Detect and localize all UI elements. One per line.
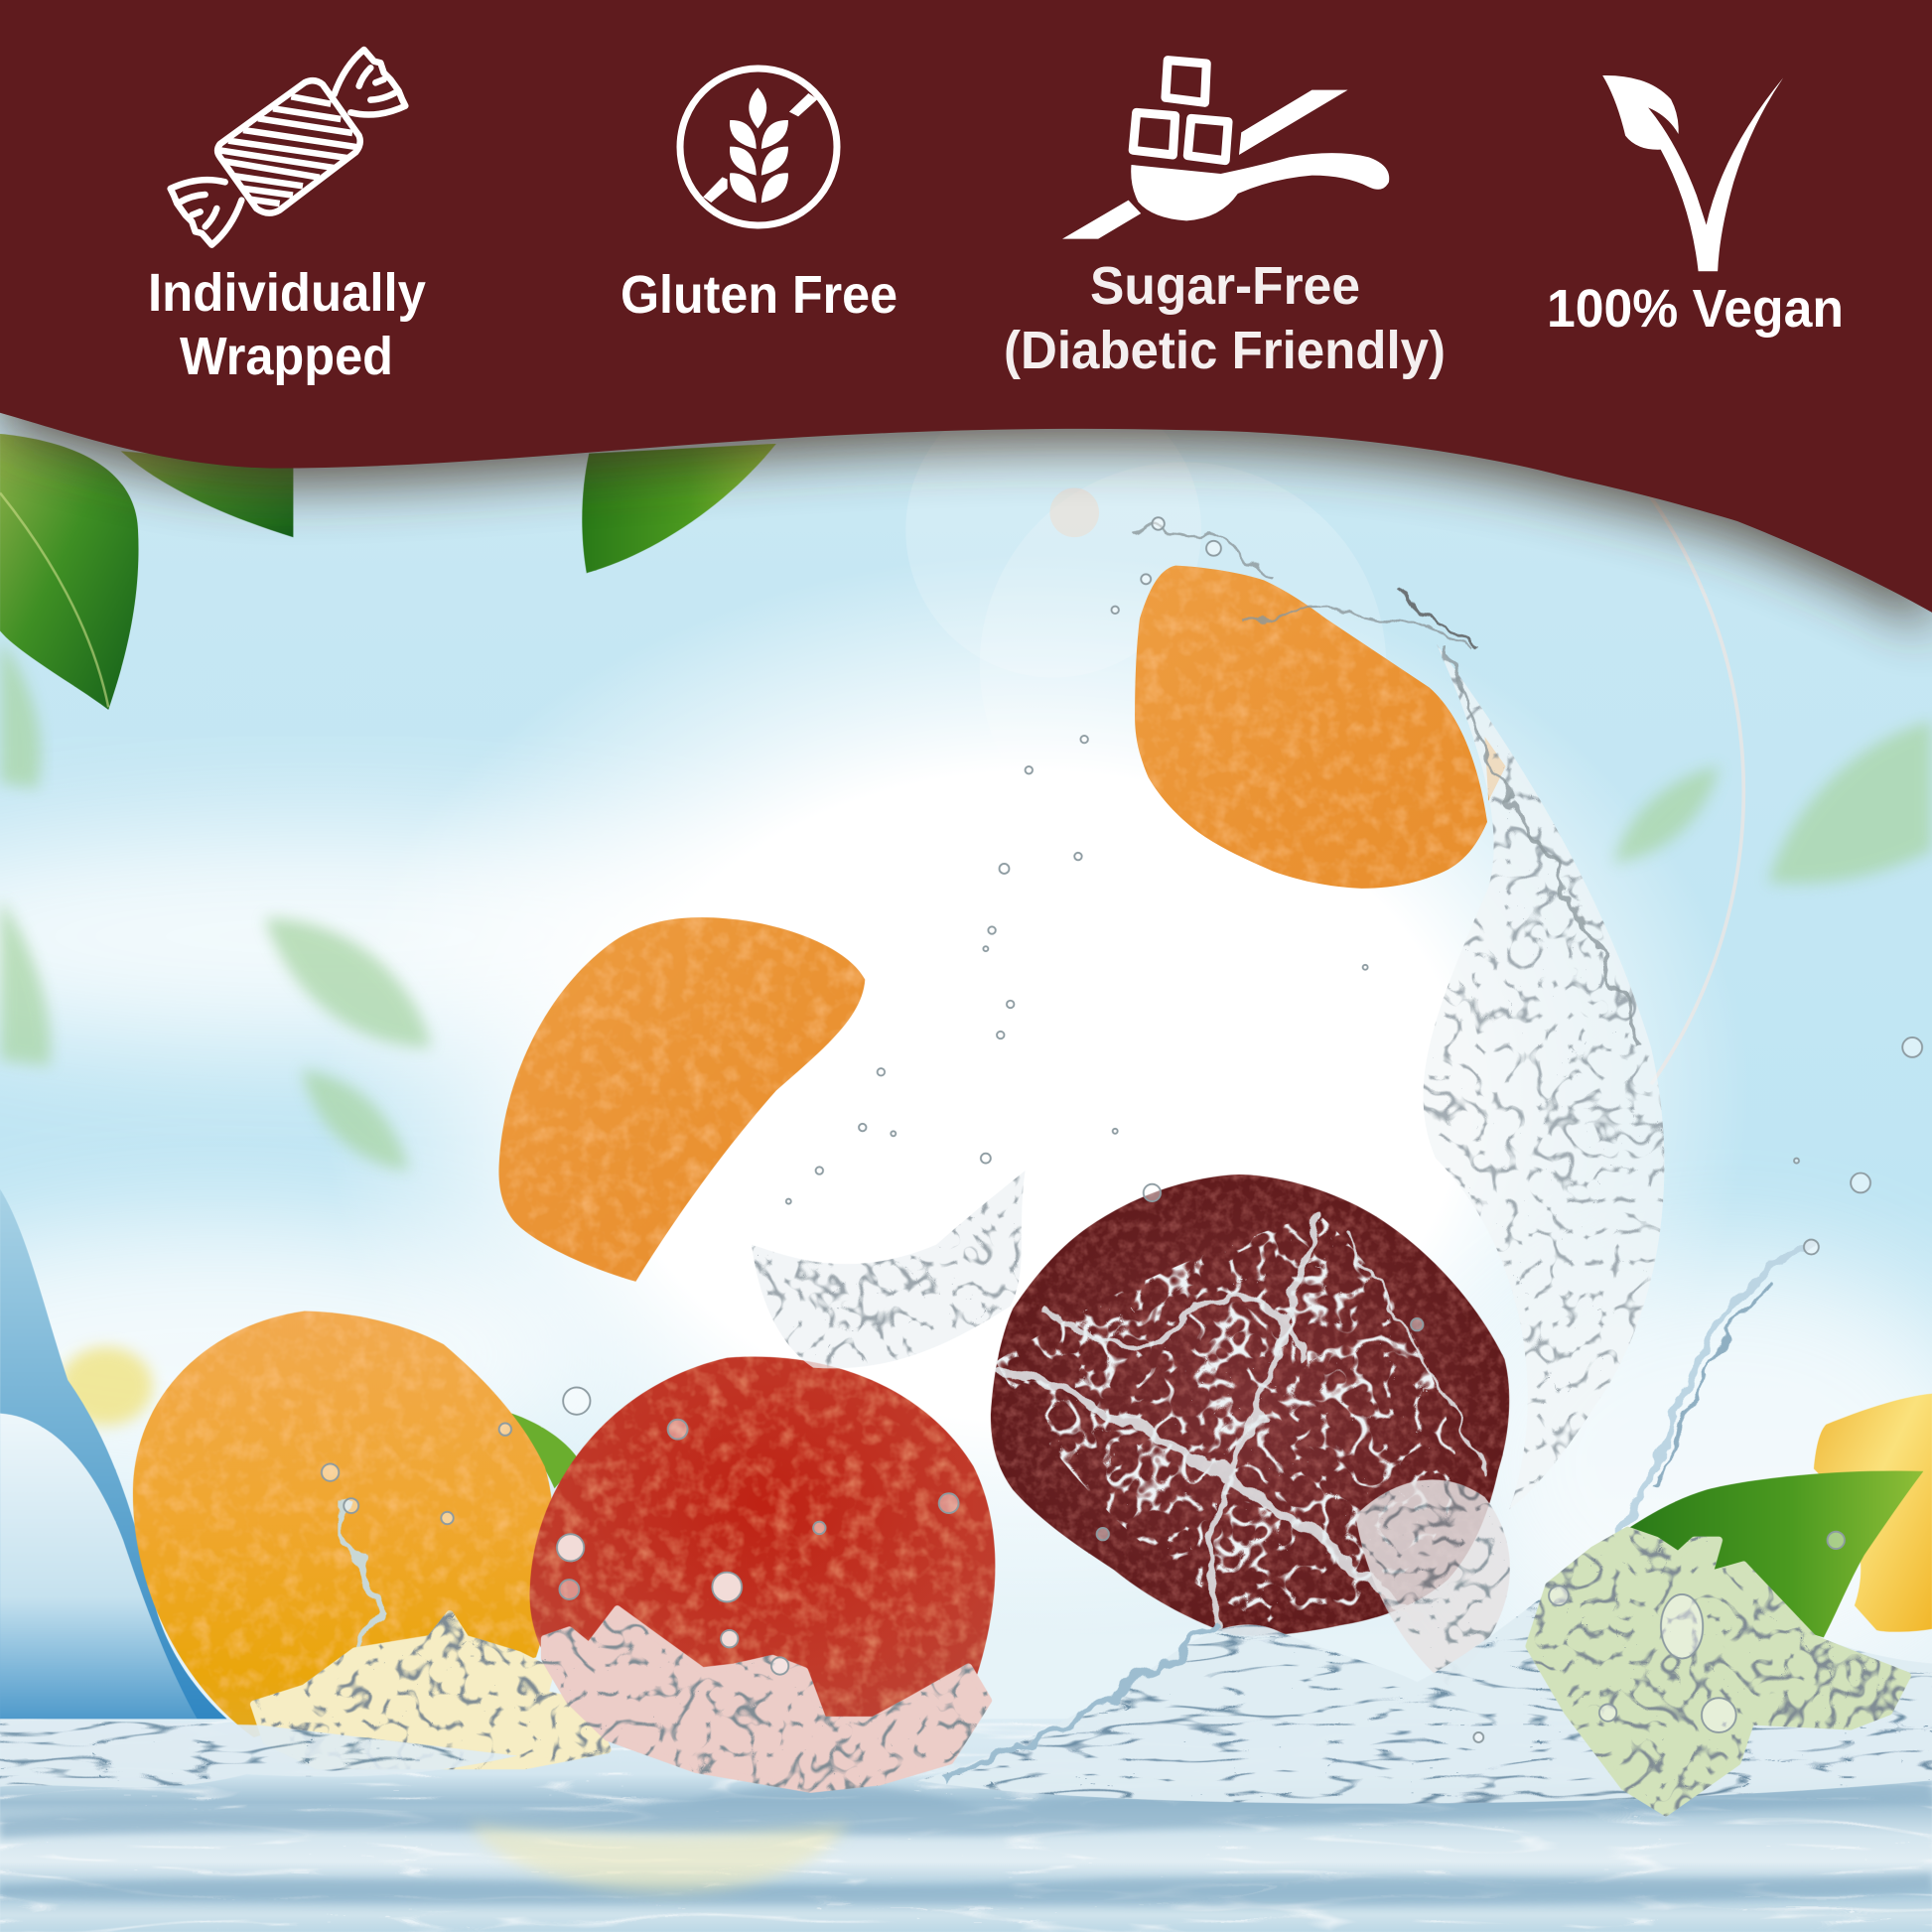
icon: wrapped candy bbox=[171, 50, 405, 245]
gummy: yellow bbox=[133, 1311, 554, 1737]
water surface bbox=[0, 1719, 1932, 1932]
pale water patch on dark gummy bbox=[1355, 1479, 1510, 1686]
label: Individually Wrapped: Individually bbox=[148, 263, 426, 323]
icon: vegan V with leaf bbox=[1602, 75, 1783, 271]
small leaf behind gummies bbox=[507, 1412, 579, 1488]
gummy: orange middle bbox=[498, 917, 865, 1282]
label: Individually Wrapped: Wrapped bbox=[180, 327, 393, 386]
label: Sugar-Free (Diabetic Friendly): (Diabetic Friendly) bbox=[1004, 321, 1446, 380]
label: Individually Wrapped bbox=[148, 263, 426, 386]
label: Sugar-Free (Diabetic Friendly) bbox=[1004, 256, 1446, 380]
green-tinted water mound bbox=[1529, 1530, 1907, 1813]
label: 100% Vegan: 100% Vegan bbox=[1547, 279, 1844, 339]
water arc splash bbox=[1424, 644, 1664, 1509]
thin water strands over orange gummy bbox=[1134, 526, 1639, 1047]
water jet on the right bbox=[1584, 1242, 1811, 1578]
pale pink splash crown bbox=[545, 1609, 988, 1789]
water surface darker bands bbox=[0, 1780, 1932, 1904]
water splash mass at the base bbox=[0, 1528, 1932, 1804]
gummy: orange top tail bbox=[1485, 737, 1506, 801]
water droplets bbox=[322, 517, 1922, 1742]
large green leaf on the right bbox=[1629, 1470, 1923, 1637]
icon: sugar cubes on spoon bbox=[1062, 61, 1389, 239]
sharp leaves along the banner bbox=[0, 434, 776, 710]
icon: gluten free wheat bbox=[680, 69, 837, 225]
label: Gluten Free: Gluten Free bbox=[621, 265, 897, 325]
gummy: red bbox=[530, 1356, 995, 1725]
reflection of gummies in water bbox=[469, 1824, 850, 1892]
label: Sugar-Free (Diabetic Friendly): Sugar-Free bbox=[1090, 256, 1360, 316]
gummy: orange top bbox=[1135, 566, 1487, 889]
water stream on yellow gummy bbox=[343, 1497, 384, 1657]
banner shadow bbox=[0, 17, 1932, 629]
snowy blue mountain bbox=[0, 1189, 234, 1725]
pale yellow splash crown bbox=[254, 1614, 608, 1765]
lemon slice bbox=[1814, 1394, 1932, 1632]
water flow behind red gummy bbox=[752, 1171, 1026, 1368]
gummy: dark brown bbox=[991, 1174, 1509, 1636]
water net across dark gummy bbox=[996, 1213, 1485, 1626]
blurred background leaves bbox=[0, 640, 1932, 1171]
maroon wave banner bbox=[0, 0, 1932, 613]
yellow bokeh blob bbox=[60, 1347, 153, 1426]
